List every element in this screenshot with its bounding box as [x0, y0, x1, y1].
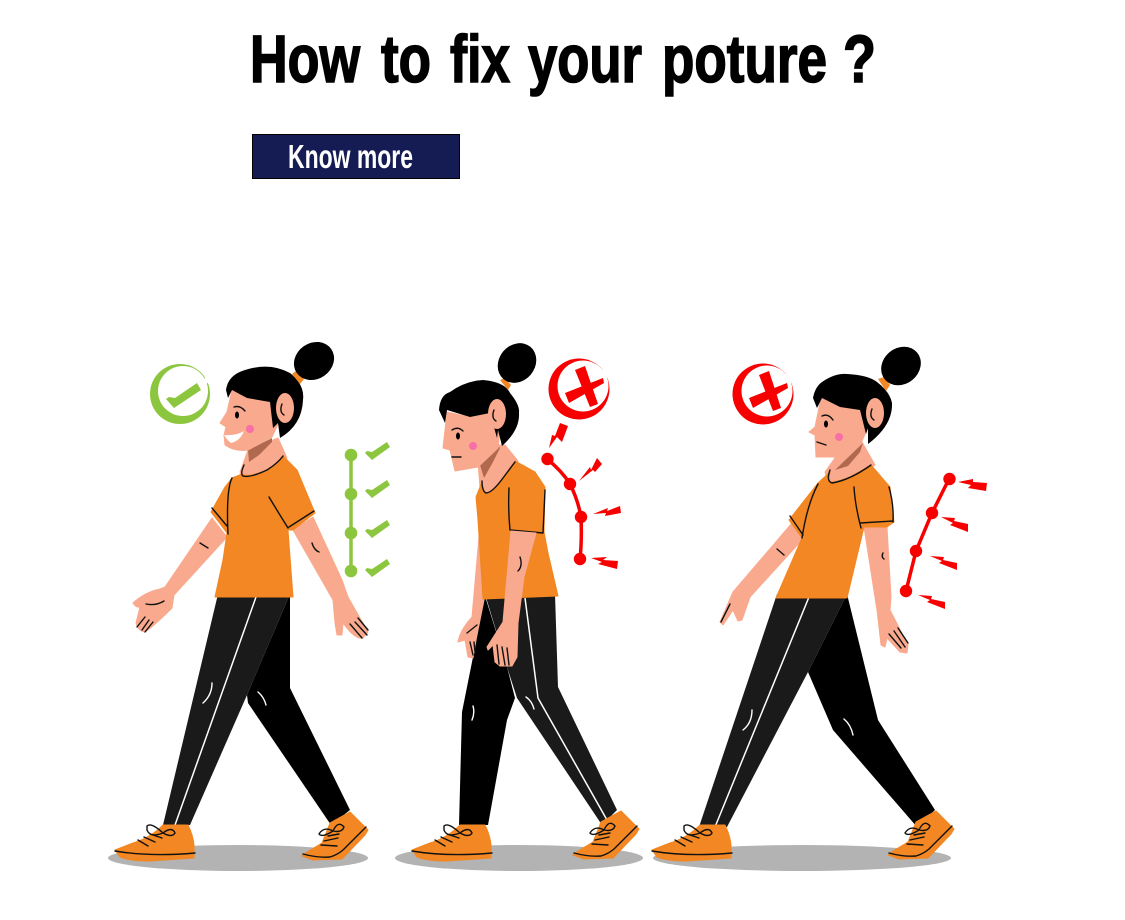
- icon: red cross badge: [548, 358, 610, 420]
- pants: [163, 594, 350, 825]
- pants: [459, 594, 617, 825]
- ground shadow: [395, 845, 643, 871]
- front arm: [487, 531, 536, 666]
- neck shadow: [480, 445, 500, 478]
- right shoe: [573, 811, 639, 859]
- icon: curved spine: [541, 423, 621, 569]
- button: know more: Know more: [288, 138, 413, 175]
- icon: green check badge: [150, 364, 211, 424]
- title: fix: [450, 22, 510, 97]
- neck shadow: [248, 438, 272, 462]
- head: [220, 367, 303, 450]
- title: How: [250, 22, 361, 97]
- figure: slouched posture: [395, 335, 643, 871]
- head: [439, 380, 519, 471]
- shirt: [476, 461, 558, 599]
- icon: straight spine: [345, 442, 390, 577]
- neck: [478, 445, 518, 498]
- icon: red cross badge: [732, 364, 794, 424]
- shirt: [211, 456, 315, 597]
- left shoe: [652, 825, 732, 861]
- hair bun: [873, 339, 929, 393]
- ground shadow: [108, 845, 368, 871]
- left arm: [720, 523, 802, 625]
- figure: correct posture: [108, 334, 390, 871]
- title: [250, 22, 876, 97]
- right shoe: [302, 812, 368, 860]
- icon: straight tilted spine: [900, 473, 987, 609]
- head: [809, 374, 892, 457]
- shirt: [776, 465, 894, 598]
- neck shadow: [835, 443, 863, 470]
- pants: [699, 594, 935, 827]
- hair bun: [490, 335, 544, 391]
- left shoe: [412, 825, 492, 861]
- right arm: [293, 517, 368, 638]
- neck: [240, 438, 287, 484]
- left shoe: [115, 825, 195, 861]
- left arm: [133, 518, 227, 632]
- button: know more: [252, 134, 460, 178]
- right shoe: [888, 811, 954, 859]
- back arm: [458, 525, 491, 658]
- figure: leaning posture: [652, 339, 987, 871]
- ground shadow: [653, 845, 951, 871]
- hair bun: [286, 334, 342, 388]
- title: your: [528, 22, 642, 97]
- title: to: [381, 22, 431, 97]
- right arm: [864, 527, 908, 653]
- neck: [825, 442, 875, 488]
- title: poture: [662, 22, 827, 97]
- title: ?: [843, 22, 876, 97]
